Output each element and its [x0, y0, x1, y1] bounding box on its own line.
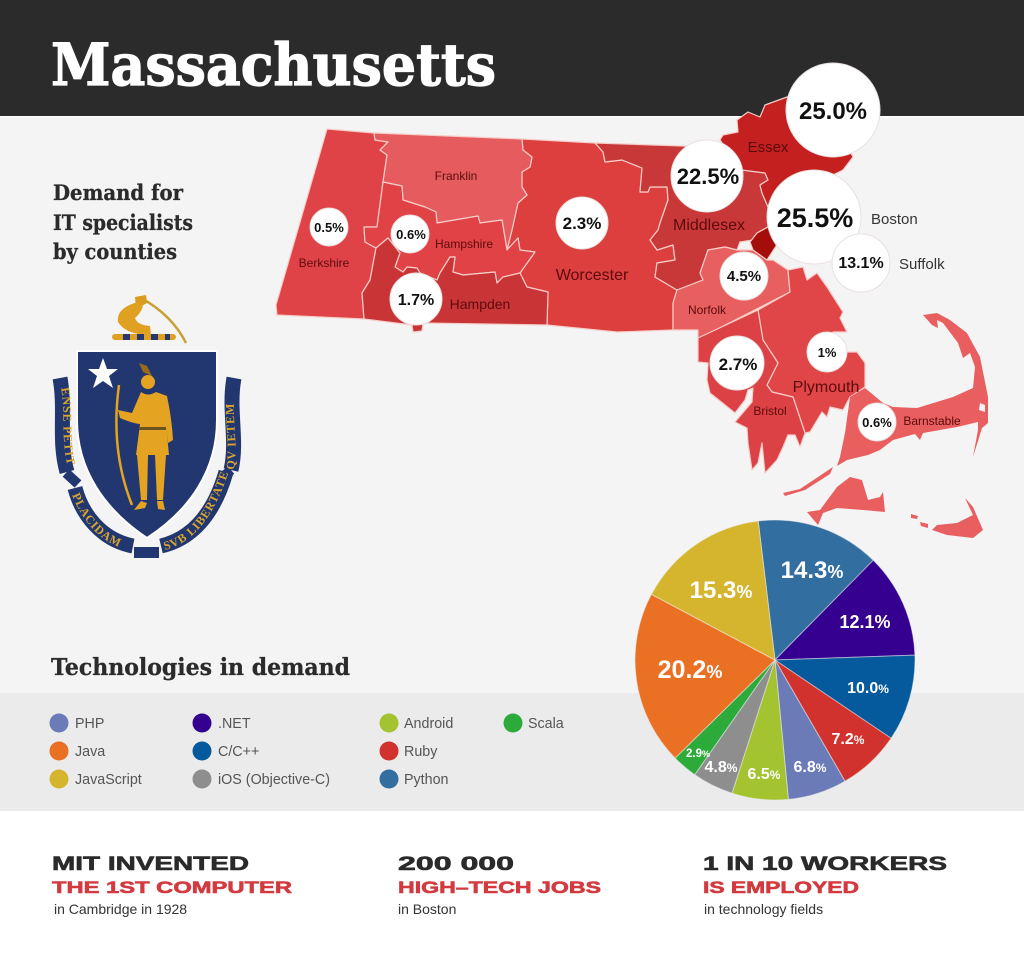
bubble values: 25.0%: [799, 98, 867, 125]
fact: workers: IS EMPLOYED: [703, 878, 859, 897]
heading: demand for IT specialists: [53, 180, 193, 264]
title: Massachusetts: [51, 31, 496, 99]
fact: high-tech jobs: in Boston: [398, 901, 456, 917]
county labels: Franklin: [435, 169, 477, 183]
seal motto: SVB LIBERTATE: [164, 472, 228, 550]
bubble values: 0.5%: [314, 220, 344, 235]
bubble values: 0.6%: [396, 227, 426, 242]
seal motto: QV IETEM: [226, 404, 237, 469]
pie chart values: 4.8%: [705, 759, 738, 776]
county labels: Boston: [871, 211, 918, 228]
pie chart values: 10.0%: [847, 680, 889, 697]
header band: [0, 0, 1024, 118]
county labels: Bristol: [753, 404, 787, 418]
seal figure: [116, 363, 173, 510]
pie chart values: 20.2%: [658, 656, 722, 684]
county labels: Suffolk: [899, 256, 945, 273]
fact: MIT: [52, 854, 292, 917]
seal ribbons: [60, 378, 234, 546]
fact: workers: in technology fields: [704, 901, 823, 917]
fact: high-tech jobs: HIGH–TECH JOBS: [398, 878, 601, 897]
county labels: Plymouth: [793, 379, 859, 396]
pie chart values: 12.1%: [839, 612, 891, 632]
legend: iOS (Objective-C): [218, 772, 330, 788]
pie chart values: 7.2%: [832, 731, 865, 748]
fact: MIT: in Cambridge in 1928: [54, 901, 187, 917]
legend: [50, 714, 564, 788]
bubble values: 1%: [818, 345, 837, 360]
heading: demand for IT specialists: Demand for: [53, 180, 184, 205]
seal motto: [61, 387, 237, 550]
legend: Python: [404, 772, 449, 788]
fact: MIT: MIT INVENTED: [52, 854, 249, 875]
legend: JavaScript: [75, 772, 142, 788]
bubble values: 0.6%: [862, 415, 892, 430]
bubble values: 2.3%: [563, 214, 601, 233]
county: Suffolk and Boston: [750, 227, 780, 260]
pie chart values: 15.3%: [690, 577, 752, 604]
fact: workers: 1 IN 10 WORKERS: [703, 854, 947, 875]
county labels: [299, 139, 961, 428]
heading: technologies in demand: Technologies in demand: [51, 654, 350, 681]
pie chart values: 6.5%: [748, 766, 781, 783]
bubble values: 1.7%: [398, 292, 434, 309]
pie chart: technologies: [635, 520, 915, 800]
county labels: Essex: [748, 139, 789, 156]
county labels: Berkshire: [299, 256, 350, 270]
bubble values: 4.5%: [727, 268, 761, 285]
seal shield: [77, 351, 217, 538]
seal motto: ENSE PETIT: [61, 387, 75, 464]
county: Berkshire: [276, 129, 388, 319]
county: Bristol: [698, 310, 805, 473]
legend: C/C++: [218, 744, 259, 760]
county: Hampshire: [364, 182, 535, 283]
county: Worcester: [507, 139, 677, 332]
state seal: [52, 295, 242, 558]
fact: MIT: THE 1ST COMPUTER: [52, 878, 292, 897]
county labels: Norfolk: [688, 303, 727, 317]
bubble values: 25.5%: [777, 203, 853, 233]
legend: Android: [404, 716, 453, 732]
county: Norfolk: [673, 247, 790, 339]
county: Hampden: [362, 238, 548, 332]
county: Franklin: [374, 133, 532, 250]
bubble values: 22.5%: [677, 164, 739, 189]
seal ribbon centre: [134, 547, 159, 558]
pie chart values: 6.8%: [794, 759, 827, 776]
legend: Java: [75, 744, 105, 760]
heading: demand for IT specialists: by counties: [53, 239, 177, 264]
fact: high-tech jobs: [398, 854, 601, 917]
pie chart values: 14.3%: [781, 557, 843, 584]
pie chart values: [658, 557, 891, 783]
seal star: [88, 358, 118, 388]
bubble values: 2.7%: [719, 355, 757, 374]
legend: Ruby: [404, 744, 438, 760]
county: Plymouth: [758, 267, 865, 433]
bubble values: 13.1%: [838, 255, 884, 272]
legend: .NET: [218, 716, 251, 732]
county labels: Hampshire: [435, 237, 493, 251]
fact: high-tech jobs: 200 000: [398, 854, 514, 875]
county labels: Hampden: [450, 296, 510, 312]
map of Massachusetts counties: [276, 97, 988, 538]
seal motto: PLACIDAM: [72, 492, 122, 547]
county labels: Middlesex: [673, 217, 745, 234]
county labels: Worcester: [556, 267, 629, 284]
legend: Scala: [528, 716, 564, 732]
legend: PHP: [75, 716, 104, 732]
heading: demand for IT specialists: IT specialists: [53, 210, 193, 235]
seal crest: arm and sword: [115, 295, 186, 343]
county: Middlesex: [595, 143, 768, 290]
county labels: Barnstable: [903, 414, 961, 428]
fact: workers: [703, 854, 947, 917]
county: Barnstable: [783, 313, 988, 538]
county: Essex: [720, 97, 853, 207]
percentage bubbles: [310, 63, 896, 441]
pie chart values: 2.9%: [686, 748, 710, 760]
bubble values: [314, 98, 892, 430]
